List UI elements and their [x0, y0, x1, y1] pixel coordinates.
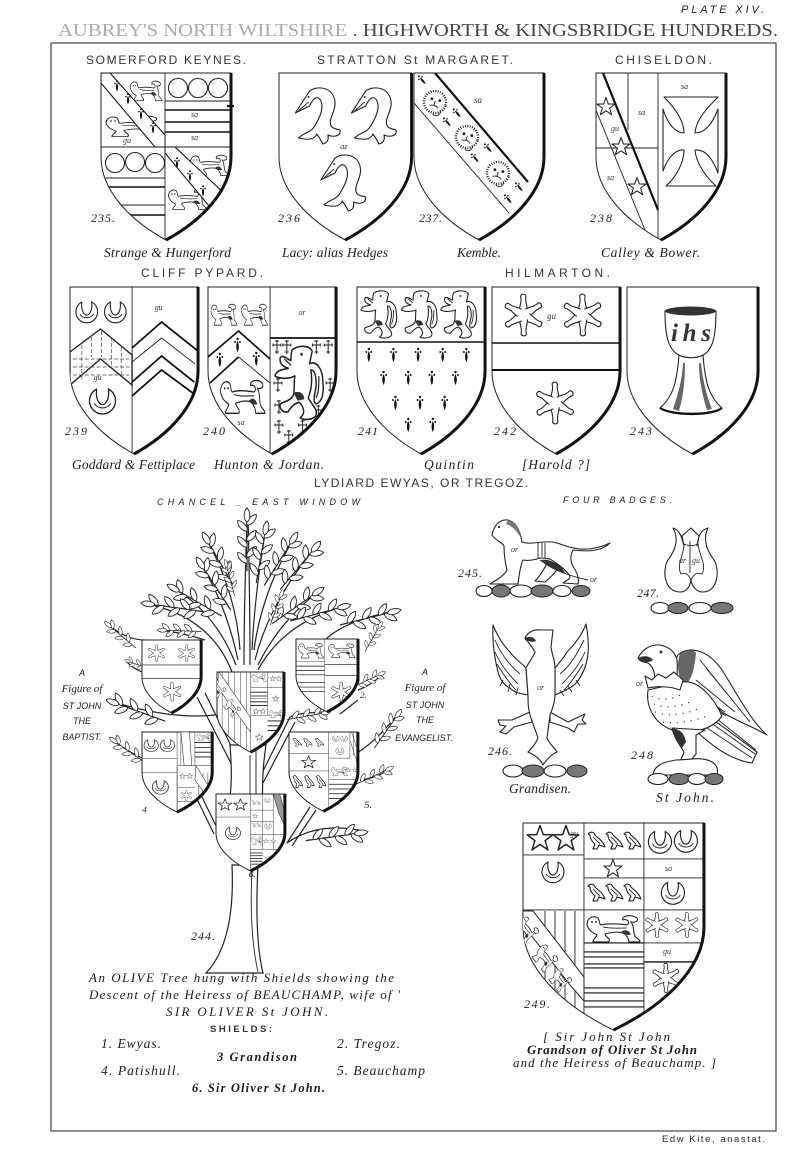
number 235: 235. — [91, 211, 115, 225]
number 237: 237. — [419, 211, 442, 225]
shield 4: Patishull — [142, 732, 212, 815]
shield 238: Calley and Bower: gu — [611, 124, 619, 133]
shield 242: Harold: gu — [547, 311, 557, 321]
caption: Grandisen: Grandisen. — [509, 781, 571, 796]
shield 235: Strange and Hungerford: sa — [191, 110, 198, 119]
heading: Somerford Keynes: SOMERFORD KEYNES. — [86, 53, 246, 67]
caption: olive tree description: SIR OLIVER St JOHN. — [166, 1004, 328, 1019]
caption: Harold: [Harold ?] — [522, 457, 590, 472]
subheading: Four Badges: FOUR BADGES. — [563, 495, 672, 505]
shield 238: Calley and Bower — [596, 73, 726, 240]
caption: Sir John St John: and the Heiress of Beauchamp. ] — [513, 1055, 716, 1070]
badge 247: tulip-shaped device — [651, 528, 733, 614]
shield list: 1. Ewyas. — [101, 1036, 161, 1051]
credit: Edw Kite, anastat. — [662, 1134, 765, 1145]
shield 249: Sir John St John: sa — [665, 864, 672, 873]
caption: Hunton & Jordan: Hunton & Jordan. — [213, 457, 324, 472]
badge 246: eagle displayed — [493, 624, 588, 777]
shield list: 3 Grandison — [216, 1050, 297, 1064]
caption: St John: St John. — [656, 790, 714, 805]
shield list — [101, 1036, 425, 1095]
shield 240: Hunton and Jordan: or — [299, 308, 307, 317]
shield 238: Calley and Bower: sa — [638, 108, 645, 117]
shield 249: Sir John St John: gu — [570, 829, 578, 838]
wreath — [648, 774, 723, 784]
badge 245: lion — [476, 520, 610, 597]
caption: Sir John St John — [513, 1029, 716, 1070]
shield 6: Sir Oliver St John: 6. — [249, 870, 256, 879]
number 245: 245. — [458, 566, 482, 580]
icon: chalice — [660, 306, 722, 414]
number 242: 242 — [494, 424, 516, 438]
tree trunk — [206, 745, 266, 973]
caption: olive tree description: Descent of the Heiress of BEAUCHAMP, wife of ' — [88, 987, 400, 1002]
plate number: PLATE XIV. — [681, 4, 764, 16]
subheading: Chancel East Window: CHANCEL _ EAST WINDOW — [157, 497, 362, 507]
label: St John the Baptist — [61, 668, 104, 742]
shield 241: Quintin — [357, 287, 485, 454]
number 239: 239 — [65, 424, 87, 438]
shield 235: Strange and Hungerford: sa — [191, 133, 198, 142]
shield 3: Grandison — [208, 672, 284, 752]
shield 2: Tregoz: 2. — [360, 690, 367, 700]
number 241: 241 — [358, 424, 378, 438]
number 236: 236 — [278, 211, 300, 225]
number 240: 240 — [203, 424, 225, 438]
shield 236: Lacy alias Hedges: az — [340, 142, 348, 151]
shield 243: chalice with IHS — [627, 287, 758, 454]
label: St John the Evangelist: Figure of — [404, 682, 447, 694]
number 243: 243 — [630, 424, 652, 438]
badge 246: eagle displayed: or — [537, 683, 545, 692]
shield 6: Sir Oliver St John — [216, 794, 285, 879]
heading: Stratton St Margaret: STRATTON St MARGARET. — [317, 53, 513, 67]
badge 247: tulip-shaped device: gu — [692, 556, 700, 565]
shield 249: Sir John St John: gu — [663, 947, 671, 956]
shield list: 5. Beauchamp — [337, 1063, 425, 1078]
shield 5: Beauchamp — [289, 732, 372, 811]
shield 249: Sir John St John — [511, 823, 704, 1030]
badge 248: eagle on rock — [636, 645, 767, 784]
badge 245: lion: or — [590, 575, 598, 584]
shield 235: Strange and Hungerford — [101, 73, 234, 240]
wreath — [651, 602, 733, 614]
shield 238: Calley and Bower: sa — [607, 173, 614, 182]
label: St John the Evangelist: THE — [416, 715, 435, 725]
badge 248: eagle on rock: or — [636, 679, 644, 688]
shield 238: Calley and Bower: sa — [681, 82, 688, 91]
shield 239: Goddard and Fettiplace — [70, 287, 198, 454]
shield list: 2. Tregoz. — [337, 1036, 400, 1051]
number 248: 248 — [631, 748, 653, 762]
label: St John the Baptist: THE — [73, 716, 92, 726]
shield 235: Strange and Hungerford: gu — [123, 136, 131, 145]
shield 240: Hunton and Jordan: sa — [238, 418, 245, 427]
shield list: 4. Patishull. — [101, 1063, 180, 1078]
label: St John the Evangelist: A — [421, 667, 428, 677]
heading: Chiseldon: CHISELDON. — [615, 53, 712, 67]
caption: olive tree description — [88, 970, 400, 1019]
sprigs of leaves — [100, 508, 408, 852]
number 247: 247. — [637, 586, 659, 600]
shield 1: Ewyas — [142, 640, 201, 713]
wreath — [503, 765, 587, 777]
icon: chalice: ihs — [671, 320, 711, 347]
heading: Shields: SHIELDS: — [210, 1024, 272, 1035]
shield 237: Kemble: sa — [474, 95, 483, 105]
number 249: 249. — [524, 997, 550, 1011]
caption: Quintin: Quintin — [424, 457, 474, 472]
label: St John the Evangelist: EVANGELIST. — [395, 733, 453, 743]
shield 239: Goddard and Fettiplace: gu — [94, 373, 102, 382]
shield 242: Harold — [492, 287, 620, 454]
caption: Goddard & Fettiplace: Goddard & Fettiplace — [72, 457, 195, 472]
badge 247: tulip-shaped device: ar — [679, 556, 687, 565]
label: St John the Baptist: Figure of — [61, 683, 104, 695]
olive tree with shields — [100, 508, 408, 973]
label: St John the Baptist: ST JOHN — [63, 701, 102, 711]
heading: Hilmarton: HILMARTON. — [505, 266, 610, 280]
label: St John the Baptist: A — [78, 668, 85, 678]
label: St John the Baptist: BAPTIST. — [62, 732, 102, 742]
label: St John the Evangelist: ST JOHN — [406, 700, 445, 710]
shield 4: Patishull: 4 — [142, 805, 147, 815]
label: St John the Evangelist — [395, 667, 453, 743]
caption: olive tree description: An OLIVE Tree hung with Shields showing the — [88, 970, 394, 985]
caption: Sir John St John: Grandson of Oliver St John — [527, 1042, 697, 1057]
caption: Lacy alias Hedges: Lacy: alias Hedges — [281, 245, 388, 260]
number 246: 246. — [488, 744, 512, 758]
title: AUBREY'S NORTH WILTSHIRE . HIGHWORTH & KINGSBRIDGE HUNDREDS. — [58, 20, 778, 40]
shield list: 6. Sir Oliver St John. — [192, 1081, 325, 1095]
caption: Sir John St John: [ Sir John St John — [543, 1029, 670, 1044]
caption: Calley & Bower: Calley & Bower. — [601, 245, 700, 260]
shield 236: Lacy alias Hedges — [279, 73, 412, 240]
caption: Kemble: Kemble. — [456, 245, 501, 260]
shield 240: Hunton and Jordan — [208, 287, 336, 454]
heading: Lydiard Ewyas, or Tregoz: LYDIARD EWYAS, OR TREGOZ. — [314, 476, 528, 490]
wreath — [476, 585, 590, 597]
shield 239: Goddard and Fettiplace: gu — [155, 303, 163, 312]
shield 2: Tregoz — [296, 639, 367, 712]
heading: Cliff Pypard: CLIFF PYPARD. — [141, 266, 263, 280]
badge 245: lion: or — [511, 545, 519, 554]
shield 5: Beauchamp: 5. — [364, 800, 372, 811]
caption: Strange & Hungerford: Strange & Hungerford — [104, 245, 231, 260]
shield 237: Kemble — [414, 73, 544, 240]
number 238: 238 — [590, 211, 612, 225]
tree branches — [100, 508, 408, 852]
number 244: 244. — [191, 929, 215, 943]
